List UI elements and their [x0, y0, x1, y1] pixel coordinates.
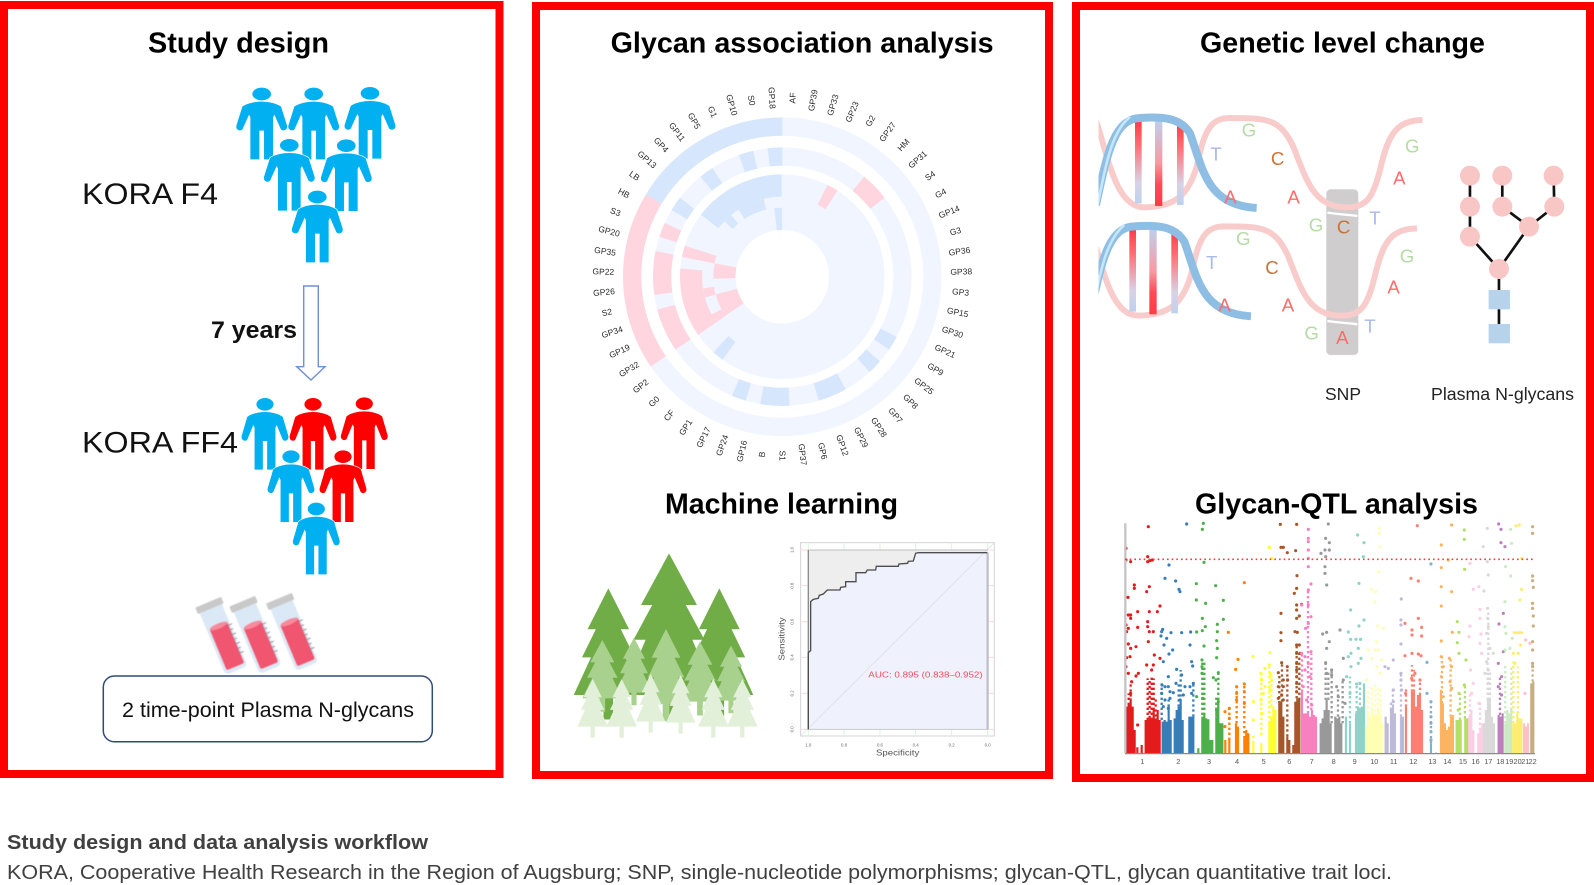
- chart: Manhattan plot: 20: [1514, 757, 1522, 766]
- chart: Manhattan plot: 10: [1370, 757, 1378, 766]
- label: 7 years: 7 years: [211, 317, 297, 344]
- label: SNP: SNP: [1325, 384, 1361, 404]
- chart: Manhattan plot: 5: [1262, 757, 1266, 766]
- labels: glycan traits: GP9: [926, 360, 946, 378]
- labels: glycan traits: GP38: [950, 266, 972, 277]
- labels: glycan traits: B: [757, 451, 767, 458]
- labels: glycan traits: HB: [616, 186, 632, 200]
- labels: glycan traits: G1: [706, 105, 720, 119]
- labels: glycan traits: GP16: [734, 439, 749, 463]
- chart: circular glycan heatmap: [592, 87, 972, 466]
- labels: glycan traits: GP19: [608, 342, 632, 360]
- labels: glycan traits: GP22: [592, 266, 615, 277]
- heading: glycan-QTL analysis: Glycan-QTL analysis: [1195, 488, 1478, 520]
- illustration: DNA strands with SNP: A: [1393, 167, 1406, 188]
- illustration: DNA strands with SNP: A: [1218, 295, 1231, 316]
- labels: glycan traits: S0: [746, 94, 758, 107]
- heading: study design: Study design: [148, 28, 329, 60]
- illustration: DNA strands with SNP: G: [1405, 135, 1420, 156]
- heading: glycan association analysis: Glycan association analysis: [611, 28, 994, 60]
- labels: glycan traits: GP21: [933, 342, 957, 360]
- heading: genetic level change: Genetic level change: [1200, 28, 1485, 60]
- panel: genetic change and glycan-QTL: [1076, 6, 1590, 778]
- labels: glycan traits: GP13: [636, 149, 659, 171]
- icon: random forest trees: [574, 553, 758, 738]
- chart: Manhattan plot: 19: [1505, 757, 1513, 766]
- chart: ROC curve: 0.4: [790, 654, 795, 660]
- labels: glycan traits: GP36: [948, 245, 971, 258]
- columns: dotted SNP columns above the bars: [1129, 590, 1533, 743]
- illustration: DNA strands with SNP: A: [1336, 327, 1349, 348]
- chart: ROC curve: 0.8: [841, 743, 848, 748]
- panel: glycan association and machine learning: [536, 6, 1049, 775]
- points: individual SNPs: [1126, 523, 1533, 740]
- illustration: DNA strands with SNP: T: [1206, 252, 1217, 273]
- chart: ROC curve: [777, 543, 994, 757]
- icon: KORA F4 participant group: [236, 87, 395, 262]
- labels: glycan traits: GP7: [886, 406, 905, 425]
- labels: glycan traits: GP15: [946, 305, 970, 319]
- chart: Manhattan plot: 2: [1176, 757, 1180, 766]
- chart: Manhattan plot: 18: [1496, 757, 1504, 766]
- illustration: DNA strands with SNP: A: [1387, 276, 1400, 297]
- labels: glycan traits: HM: [895, 137, 912, 153]
- illustration: DNA strands with SNP: G: [1242, 120, 1256, 141]
- labels: glycan traits: GP5: [686, 111, 703, 131]
- chart: ROC curve: 1.0: [790, 546, 795, 553]
- labels: glycan traits: GP23: [843, 100, 861, 124]
- labels: glycan traits: G3: [949, 225, 962, 237]
- labels: glycan traits: GP34: [600, 324, 624, 340]
- callout: plasma N-glycans box: 2 time-point Plasma N-glycans: [122, 698, 414, 722]
- chart: Manhattan plot: 8: [1332, 757, 1336, 766]
- labels: glycan traits: GP17: [694, 425, 713, 449]
- labels: glycan traits: GP3: [952, 286, 970, 298]
- chart: Manhattan plot: [1125, 523, 1537, 766]
- illustration: DNA strands with SNP: G: [1236, 228, 1251, 249]
- illustration: DNA strands with SNP: C: [1337, 216, 1350, 237]
- illustration: DNA strands with SNP: G: [1400, 245, 1414, 266]
- labels: glycan traits: GP6: [816, 442, 830, 461]
- chart: Manhattan plot: 15: [1459, 757, 1467, 766]
- illustration: DNA strands with SNP: A: [1224, 186, 1237, 207]
- labels: glycan traits: GP39: [806, 88, 820, 112]
- chart: Manhattan plot: 22: [1529, 757, 1537, 766]
- chart: Manhattan plot: 1: [1140, 757, 1144, 766]
- chart: ROC curve: 0.0: [985, 743, 991, 748]
- caption: title: Study design and data analysis workflow: [7, 832, 428, 854]
- icon: plasma N-glycan structure: [1460, 166, 1564, 343]
- chart: ROC curve: 0.4: [913, 743, 919, 748]
- labels: glycan traits: GP1: [677, 417, 694, 437]
- arrow: follow-up: [297, 286, 325, 380]
- illustration: DNA strands with SNP: T: [1369, 207, 1381, 228]
- labels: glycan traits: GP28: [869, 415, 889, 439]
- labels: glycan traits: [592, 87, 972, 466]
- labels: glycan traits: S4: [923, 168, 937, 183]
- labels: glycan traits: GP35: [594, 245, 617, 258]
- labels: glycan traits: GP2: [631, 377, 651, 395]
- labels: glycan traits: GP27: [877, 120, 898, 144]
- labels: glycan traits: GP10: [724, 93, 740, 117]
- illustration: DNA strands with SNP: G: [1309, 215, 1323, 236]
- chart: ROC curve: 0.6: [790, 618, 795, 625]
- icon: KORA FF4 participant group: [242, 397, 388, 574]
- illustration: DNA strands with SNP: [1088, 113, 1423, 355]
- label: KORA F4: KORA F4: [82, 178, 218, 211]
- labels: glycan traits: GP24: [714, 433, 731, 457]
- labels: glycan traits: GP26: [593, 286, 615, 298]
- illustration: DNA strands with SNP: G: [1304, 322, 1319, 343]
- labels: glycan traits: G2: [863, 113, 878, 128]
- icon: plasma tubes: [195, 593, 320, 676]
- labels: glycan traits: AF: [787, 92, 798, 104]
- chart: ROC curve: Specificity: [876, 747, 920, 757]
- labels: glycan traits: S1: [777, 450, 787, 461]
- chart: ROC curve: 0.8: [790, 582, 795, 589]
- heading: machine learning: Machine learning: [665, 488, 898, 520]
- illustration: DNA strands with SNP: T: [1210, 144, 1222, 165]
- chart: ROC curve: 0.2: [949, 743, 955, 748]
- label: plasma N-glycans: Plasma N-glycans: [1431, 384, 1574, 404]
- labels: glycan traits: GP11: [667, 120, 687, 144]
- bars: dense low-significance SNPs: [1127, 682, 1533, 753]
- chart: Manhattan plot: 3: [1207, 757, 1211, 766]
- panel: study design: [4, 5, 500, 774]
- chart: Manhattan plot: 14: [1443, 757, 1451, 766]
- labels: glycan traits: GP25: [912, 375, 936, 397]
- chart: Manhattan plot: 11: [1390, 757, 1397, 766]
- chart: ROC curve: 0.2: [790, 690, 795, 696]
- labels: glycan traits: GP33: [825, 93, 841, 117]
- chart: Manhattan plot: 17: [1484, 757, 1492, 766]
- labels: glycan traits: S2: [601, 306, 613, 318]
- labels: glycan traits: GP37: [797, 443, 809, 466]
- illustration: DNA strands with SNP: C: [1271, 148, 1284, 169]
- labels: glycan traits: G0: [646, 394, 662, 409]
- labels: glycan traits: GP32: [617, 359, 641, 379]
- illustration: DNA strands with SNP: A: [1282, 295, 1295, 316]
- chart: Manhattan plot: 7: [1310, 757, 1314, 766]
- illustration: DNA strands with SNP: A: [1287, 186, 1300, 207]
- chart: Manhattan plot: 21: [1521, 757, 1529, 766]
- labels: glycan traits: G4: [933, 186, 948, 200]
- labels: glycan traits: GP18: [766, 87, 778, 109]
- chart: ROC curve: AUC: 0.895 (0.838–0.952): [868, 670, 983, 680]
- illustration: DNA strands with SNP: T: [1364, 316, 1376, 337]
- chart: Manhattan plot: 4: [1235, 757, 1239, 766]
- label: KORA FF4: KORA FF4: [82, 426, 238, 459]
- labels: glycan traits: GP31: [906, 148, 929, 170]
- labels: glycan traits: GP20: [597, 224, 621, 239]
- labels: glycan traits: LB: [627, 169, 642, 183]
- labels: glycan traits: GP8: [901, 392, 920, 411]
- chart: ROC curve: Sensitivity: [777, 617, 787, 661]
- labels: glycan traits: CF: [662, 408, 676, 423]
- chart: ROC curve: 0.0: [790, 726, 795, 732]
- callout: plasma N-glycans box: [103, 676, 432, 742]
- caption: abbreviations: KORA, Cooperative Health Research in the Region of Augsburg; SNP, single-nucleotide polymorphisms; glycan-QTL, glycan quantitative trait loci.: [7, 861, 1392, 884]
- labels: glycan traits: GP12: [834, 433, 851, 457]
- labels: glycan traits: S3: [609, 205, 622, 218]
- chart: Manhattan plot: 9: [1353, 757, 1357, 766]
- labels: glycan traits: GP4: [652, 135, 671, 155]
- chart: Manhattan plot: 16: [1472, 757, 1480, 766]
- chart: Manhattan plot: 12: [1409, 757, 1417, 766]
- chart: Manhattan plot: 6: [1287, 757, 1291, 766]
- chart: Manhattan plot: 13: [1428, 757, 1436, 766]
- labels: glycan traits: GP14: [937, 203, 961, 220]
- illustration: DNA strands with SNP: C: [1265, 257, 1279, 278]
- chart: ROC curve: 0.6: [877, 743, 884, 748]
- chart: ROC curve: 1.0: [805, 743, 812, 748]
- labels: glycan traits: GP29: [852, 425, 871, 450]
- labels: glycan traits: GP30: [941, 324, 965, 340]
